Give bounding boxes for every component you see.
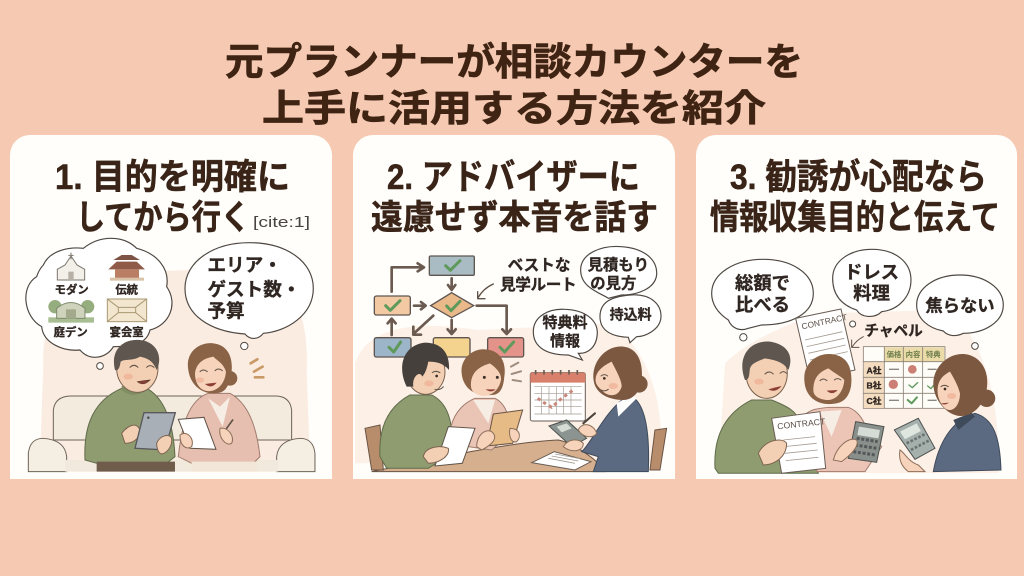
speech bubble: dress and food [833, 249, 911, 327]
panel: step 3 [696, 135, 1017, 479]
heading: step 1: してから行く [76, 199, 250, 237]
label: best tour route: 見学ルート [500, 275, 577, 294]
label: chapel: チャペル [864, 322, 923, 339]
speech bubble: dress and food: 料理 [853, 282, 890, 303]
speech bubble: reading estimates: の見方 [590, 274, 636, 292]
speech bubble: reading estimates: 見積もり [588, 256, 649, 274]
comparison table: 内容 [906, 350, 921, 359]
speech bubble: area, guests, budget: エリア・ [207, 255, 282, 276]
document: contract front [758, 412, 826, 473]
speech bubble: compare totals: 比べる [735, 294, 790, 315]
comparison table: A社 [867, 364, 882, 375]
icon: garden venue [48, 300, 94, 323]
speech bubble: compare totals: 総額で [735, 272, 790, 293]
person: advisor in navy suit [582, 347, 649, 472]
speech bubble: dress and food: ドレス [844, 261, 899, 282]
thought cloud: venue types: 宴会室 [110, 325, 144, 339]
speech bubble: area, guests, budget [185, 243, 313, 350]
thought cloud: venue types: 庭デン [54, 325, 88, 339]
speech bubble: compare totals [712, 259, 813, 341]
sparkle marks [511, 363, 521, 381]
document: contract back [796, 309, 855, 380]
speech bubble: area, guests, budget: ゲスト数・ [207, 279, 301, 300]
speech bubble: bring-in fees: 持込料 [610, 306, 652, 322]
speech bubble: don't rush [917, 275, 1003, 349]
comparison table: 価格 [887, 350, 902, 359]
heading: step 1: 1. 目的を明確に [55, 158, 290, 197]
person: advisor in navy suit [933, 354, 1001, 472]
calendar [530, 370, 585, 421]
heading: step 1: [cite:1] [253, 214, 310, 231]
sparkle marks [251, 359, 263, 377]
flowchart [374, 256, 524, 357]
table [372, 440, 605, 472]
heading: step 2: 2. アドバイザーに [387, 158, 640, 197]
speech bubble: perks info [533, 309, 597, 360]
calculator: woman [833, 422, 884, 462]
icon: modern chapel [57, 253, 85, 280]
notepad [178, 417, 233, 449]
heading: step 3: 3. 勧誘が心配なら [730, 158, 987, 197]
person: man in green sweater [380, 343, 452, 468]
panel: step 2 [353, 135, 675, 479]
comparison table: B社 [867, 380, 882, 391]
icon: banquet hall [107, 299, 147, 322]
speech bubble: bring-in fees [600, 295, 661, 343]
thought cloud: venue types: 伝統 [115, 282, 139, 296]
thought cloud: venue types [26, 238, 172, 369]
icon: traditional temple [108, 255, 145, 281]
person: woman in pink cardigan [804, 354, 882, 472]
tablet [135, 413, 175, 454]
person: man in green sweater [715, 342, 818, 473]
label: best tour route: ベストな [508, 257, 571, 275]
comparison table: 特典 [926, 350, 941, 359]
person: man in green sweater [85, 340, 175, 472]
label: best tour route [478, 257, 577, 299]
speech bubble: area, guests, budget: 予算 [207, 300, 245, 321]
calculator: advisor [894, 418, 935, 472]
illustration: couple on sofa [26, 238, 315, 472]
title: 元プランナーが相談カウンターを [225, 42, 803, 84]
speech bubble: don't rush: 焦らない [925, 296, 995, 316]
comparison table: C社 [867, 395, 882, 406]
title: 上手に活用する方法を紹介 [262, 88, 766, 129]
calculator and paper [532, 413, 597, 470]
speech bubble: perks info: 特典料 [543, 313, 587, 331]
heading: step 2: 遠慮せず本音を話す [371, 199, 658, 237]
label: chapel [852, 322, 923, 347]
speech bubble: reading estimates [581, 246, 657, 298]
speech bubble: perks info: 情報 [550, 332, 580, 350]
chairs [365, 425, 667, 470]
illustration: comparing contracts [712, 249, 1003, 473]
heading: step 2 [371, 158, 658, 237]
thought cloud: venue types: モダン [55, 282, 89, 296]
sofa [28, 396, 315, 472]
heading: step 3 [710, 158, 1000, 237]
heading: step 1 [55, 158, 310, 237]
panel: step 1 [10, 135, 332, 479]
notepads [423, 410, 523, 466]
document: contract back: CONTRACT [801, 312, 848, 331]
illustration: consultation table [355, 246, 667, 472]
title [225, 42, 803, 129]
person: woman in pink cardigan [451, 349, 510, 450]
person: woman in pink cardigan [178, 343, 260, 472]
document: contract front: CONTRACT [777, 416, 826, 431]
comparison table [863, 347, 945, 408]
